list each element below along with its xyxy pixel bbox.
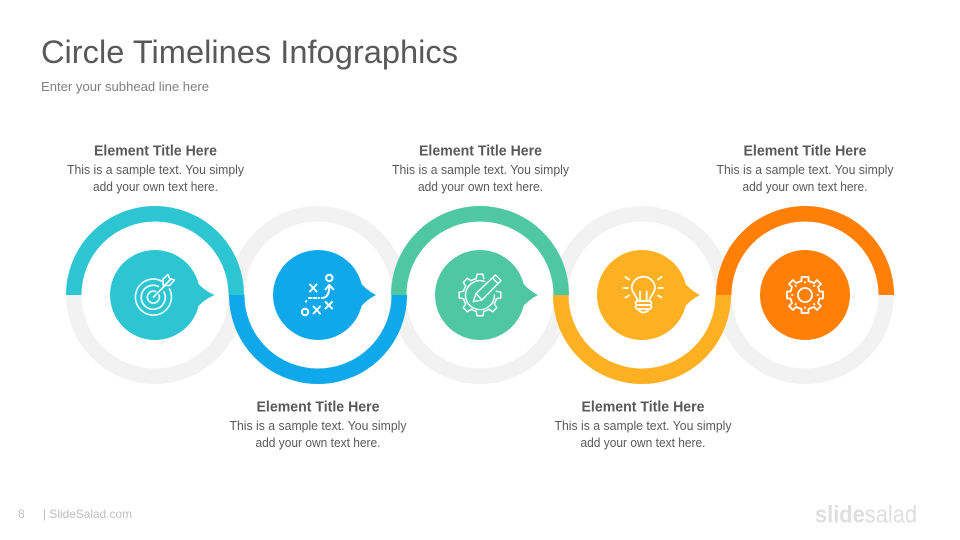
text block: step 3 [392, 144, 570, 194]
step 2 ring arc [237, 295, 399, 376]
icon: strategy play [302, 275, 333, 315]
step 4 ring arc [561, 295, 723, 376]
footer site name: | SlideSalad.com [43, 507, 132, 521]
text block: step 2: Element Title Here [256, 400, 380, 416]
text block: step 5: This is a sample text. You simply [716, 163, 894, 177]
text block: step 1: This is a sample text. You simply [67, 163, 245, 177]
text block: step 5: add your own text here. [742, 180, 868, 194]
step 5 badge with gear icon [760, 250, 850, 340]
text block: step 3: add your own text here. [418, 180, 543, 194]
text block: step 4: Element Title Here [582, 400, 704, 416]
step 3 badge with gear and pencil icon [435, 250, 538, 340]
text block: step 4: add your own text here. [580, 436, 706, 450]
text block: step 4: This is a sample text. You simply [554, 419, 732, 433]
icon: light bulb [624, 277, 663, 312]
step 2 badge with strategy play icon [273, 250, 376, 340]
text block: step 3: This is a sample text. You simply [392, 163, 570, 177]
step 3 ring arc [399, 214, 561, 295]
text block: step 2 [230, 400, 407, 450]
step 4 badge with light bulb icon [597, 250, 700, 340]
step 1 badge with target icon [110, 250, 214, 340]
text block: step 4 [554, 400, 732, 450]
text block: step 2: This is a sample text. You simply [230, 419, 407, 433]
text block: step 3: Element Title Here [419, 144, 542, 160]
text block: step 2: add your own text here. [256, 436, 380, 450]
icon: gear [787, 277, 823, 313]
text block: step 5 [716, 144, 894, 194]
text block: step 5: Element Title Here [744, 144, 866, 160]
step 1 ring arc [74, 214, 236, 295]
title: Circle Timelines Infographics [41, 34, 458, 70]
step 5 ring arc [724, 214, 886, 295]
footer logo: slidesalad [815, 502, 917, 528]
footer page number: 8 [18, 507, 25, 521]
text block: step 1 [67, 144, 245, 194]
text block: step 1: Element Title Here [94, 144, 217, 160]
text block: step 1: add your own text here. [93, 180, 218, 194]
subhead: Enter your subhead line here [41, 79, 209, 94]
icon: target [135, 274, 174, 315]
icon: gear and pencil [459, 274, 501, 316]
grey background rings [74, 214, 886, 376]
